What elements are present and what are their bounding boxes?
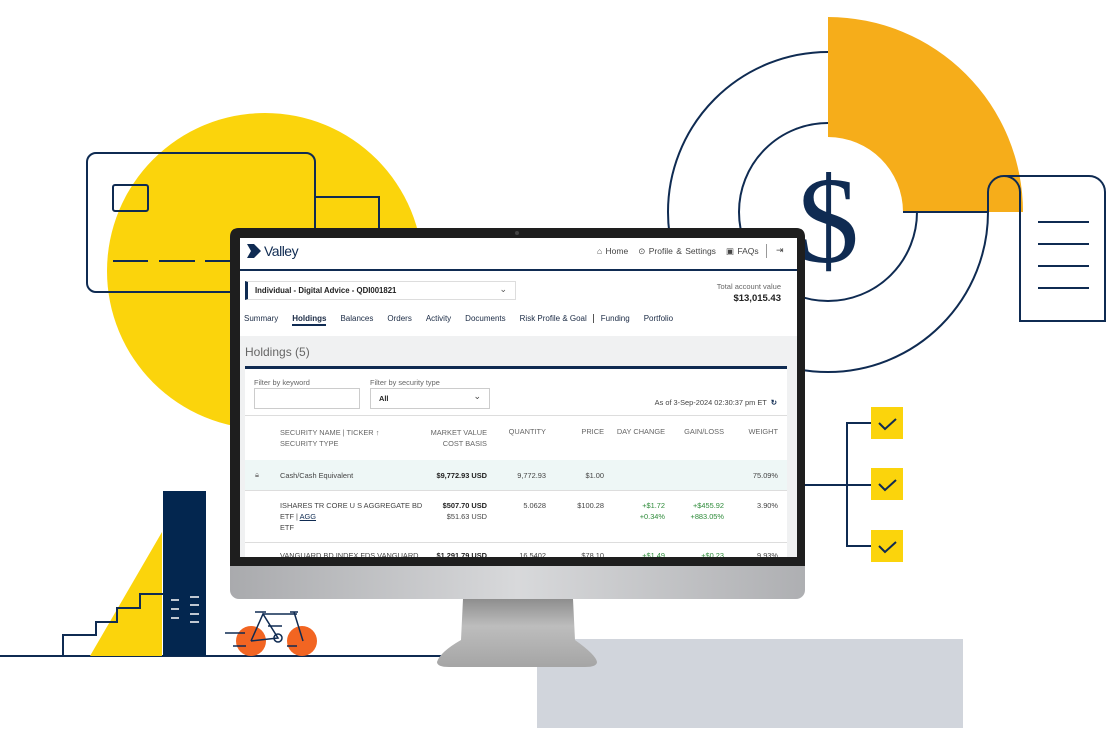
row: vanguard (partial) <box>280 551 778 557</box>
holdings table card: GAIN/LOSS <box>684 427 724 436</box>
row: cash <box>245 460 787 491</box>
holdings table card: As of 3-Sep-2024 02:30:37 pm ET ↻ <box>655 398 777 407</box>
row: AGG <box>245 492 787 543</box>
header bar: ⇥ <box>776 245 784 255</box>
holdings table card: DAY CHANGE <box>617 427 665 436</box>
gray content area <box>240 336 797 557</box>
header bar <box>247 243 784 259</box>
account selector <box>245 281 516 300</box>
logo: Valley <box>264 243 298 259</box>
row: AGG: ISHARES TR CORE U S AGGREGATE BD <box>280 501 422 510</box>
row: cash: 🔒︎ <box>255 470 259 479</box>
row: AGG: ETF <box>280 523 294 532</box>
row: AGG: $100.28 <box>577 501 604 510</box>
row: AGG: ETF | AGG <box>280 512 316 521</box>
nav links: ⌂ Home ⊙ Profile & Settings ▣ FAQs <box>597 246 759 256</box>
total account value: Total account value <box>717 282 781 291</box>
yellow circle <box>107 113 423 429</box>
row: AGG: +$1.72 <box>642 501 665 510</box>
total account value: $13,015.43 <box>733 293 781 304</box>
account selector: Individual - Digital Advice - QDI001821 <box>255 286 396 295</box>
row: cash: $1.00 <box>586 471 604 480</box>
icon: credit card <box>87 153 379 292</box>
monitor stand <box>437 599 597 667</box>
table header: SECURITY TYPE <box>280 439 338 448</box>
holdings table card: ⌄ <box>473 391 481 401</box>
row: AGG: 5.0628 <box>523 501 546 510</box>
total account value <box>716 282 781 304</box>
holdings table card: PRICE <box>581 427 604 436</box>
row: cash: $9,772.93 USD <box>436 471 487 480</box>
row: cash: 75.09% <box>753 471 778 480</box>
icon: document <box>988 176 1105 321</box>
target with dollar: $ <box>797 152 859 289</box>
icon: bicycle <box>225 612 317 656</box>
monitor screen: holdings dashboard <box>240 238 797 557</box>
gray content area: Holdings (5) <box>245 345 310 359</box>
holdings table card: QUANTITY <box>509 427 546 436</box>
row: AGG: +$455.92 <box>693 501 724 510</box>
row: AGG: 3.90% <box>757 501 778 510</box>
target with dollar <box>668 17 1023 372</box>
row: AGG: +0.34% <box>640 512 665 521</box>
ground line <box>0 655 450 657</box>
holdings table card: Filter by keyword <box>254 378 310 387</box>
monitor body <box>230 228 805 599</box>
row: AGG: +883.05% <box>690 512 724 521</box>
tabs: Summary Holdings Balances Orders Activity Documents Risk Profile & Goal Funding Portfolio <box>244 314 673 323</box>
holdings table card: WEIGHT <box>748 427 778 436</box>
table header <box>280 428 379 448</box>
checklist <box>805 407 903 562</box>
account selector: ⌄ <box>499 284 507 294</box>
row: cash: Cash/Cash Equivalent <box>280 471 353 480</box>
holdings table card <box>245 366 787 566</box>
holdings table card: COST BASIS <box>443 439 487 448</box>
stairs and building <box>63 491 206 656</box>
holdings table card: MARKET VALUE <box>431 428 487 437</box>
row: AGG: $507.70 USD <box>443 501 487 510</box>
holdings table card: Filter by security type <box>370 378 440 387</box>
gray floor block <box>537 639 963 728</box>
holdings table card: All <box>379 394 388 403</box>
table header: SECURITY NAME | TICKER ↑ <box>280 428 379 437</box>
row: AGG: $51.63 USD <box>447 512 487 521</box>
row: cash: 9,772.93 <box>517 471 546 480</box>
logo <box>247 243 299 259</box>
